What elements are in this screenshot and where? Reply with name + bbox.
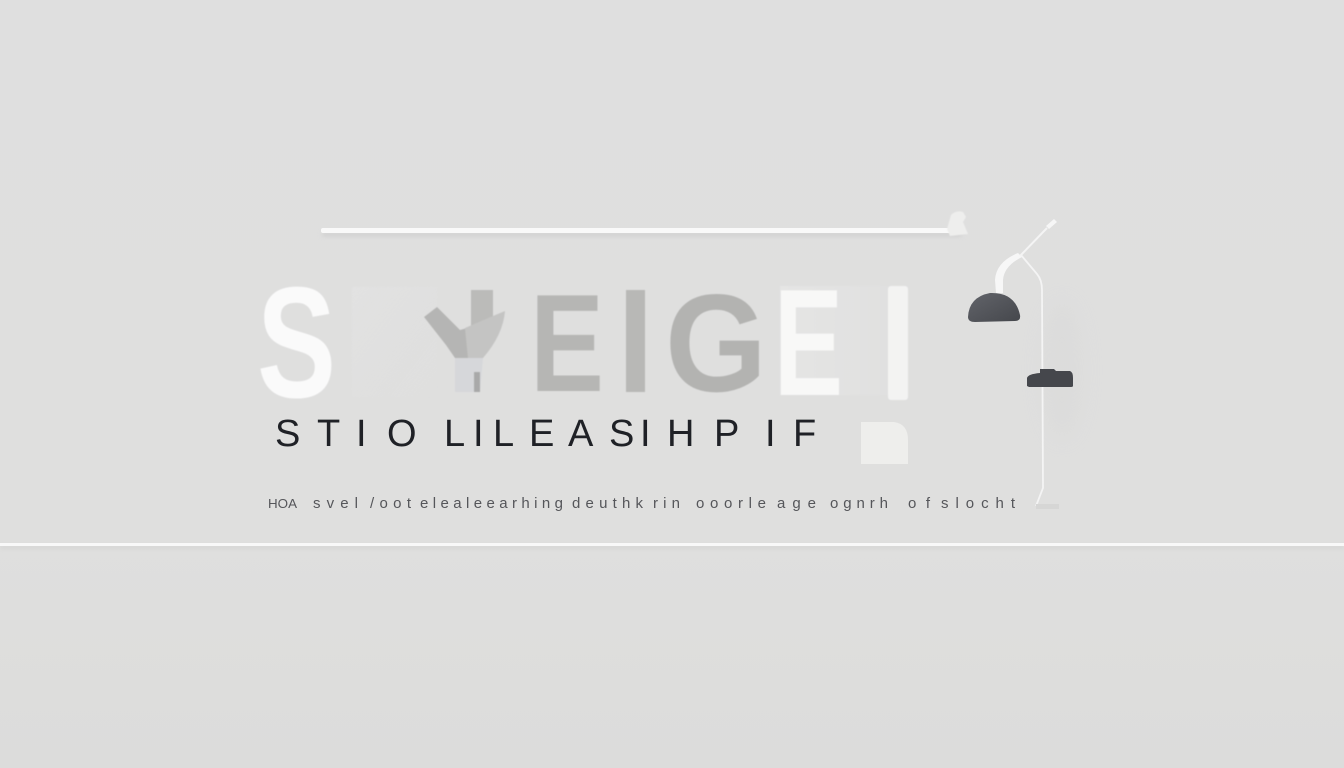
lamp arm [995,253,1022,293]
body line: rin [653,495,680,512]
title letter I white [888,286,908,400]
body line: slocht [941,495,1016,512]
small white rounded block [861,422,908,464]
title letter E: E [530,266,604,421]
lower lamp head [1027,369,1073,387]
title letter E white: E [774,258,843,428]
lamp pole [1021,255,1043,506]
body line: deuthk [572,495,644,512]
body line: svel [313,495,358,512]
title letters [257,255,908,431]
title letter S: S [257,255,336,431]
wall lamp icon [968,219,1082,509]
title letter Y [424,290,505,392]
body line: ooorle [696,495,766,512]
subtitle: STIOLILEASIHPIF [275,413,816,455]
body line: age [777,495,816,512]
faint panel behind Y [352,287,437,397]
shelf: upper white line with bracket [321,211,968,236]
lamp shade [968,293,1020,322]
body line: HOA [268,496,297,511]
white panel behind second E [780,286,890,395]
body line: ognrh [830,495,888,512]
lamp base [1036,504,1059,509]
body line: elealeearhing [420,495,563,512]
body line: /oot [370,495,412,512]
body line: of [908,495,931,512]
lower horizontal rule [0,543,1344,548]
title letter I [626,290,645,392]
title letter G: G [665,266,767,421]
body line [268,495,1016,512]
